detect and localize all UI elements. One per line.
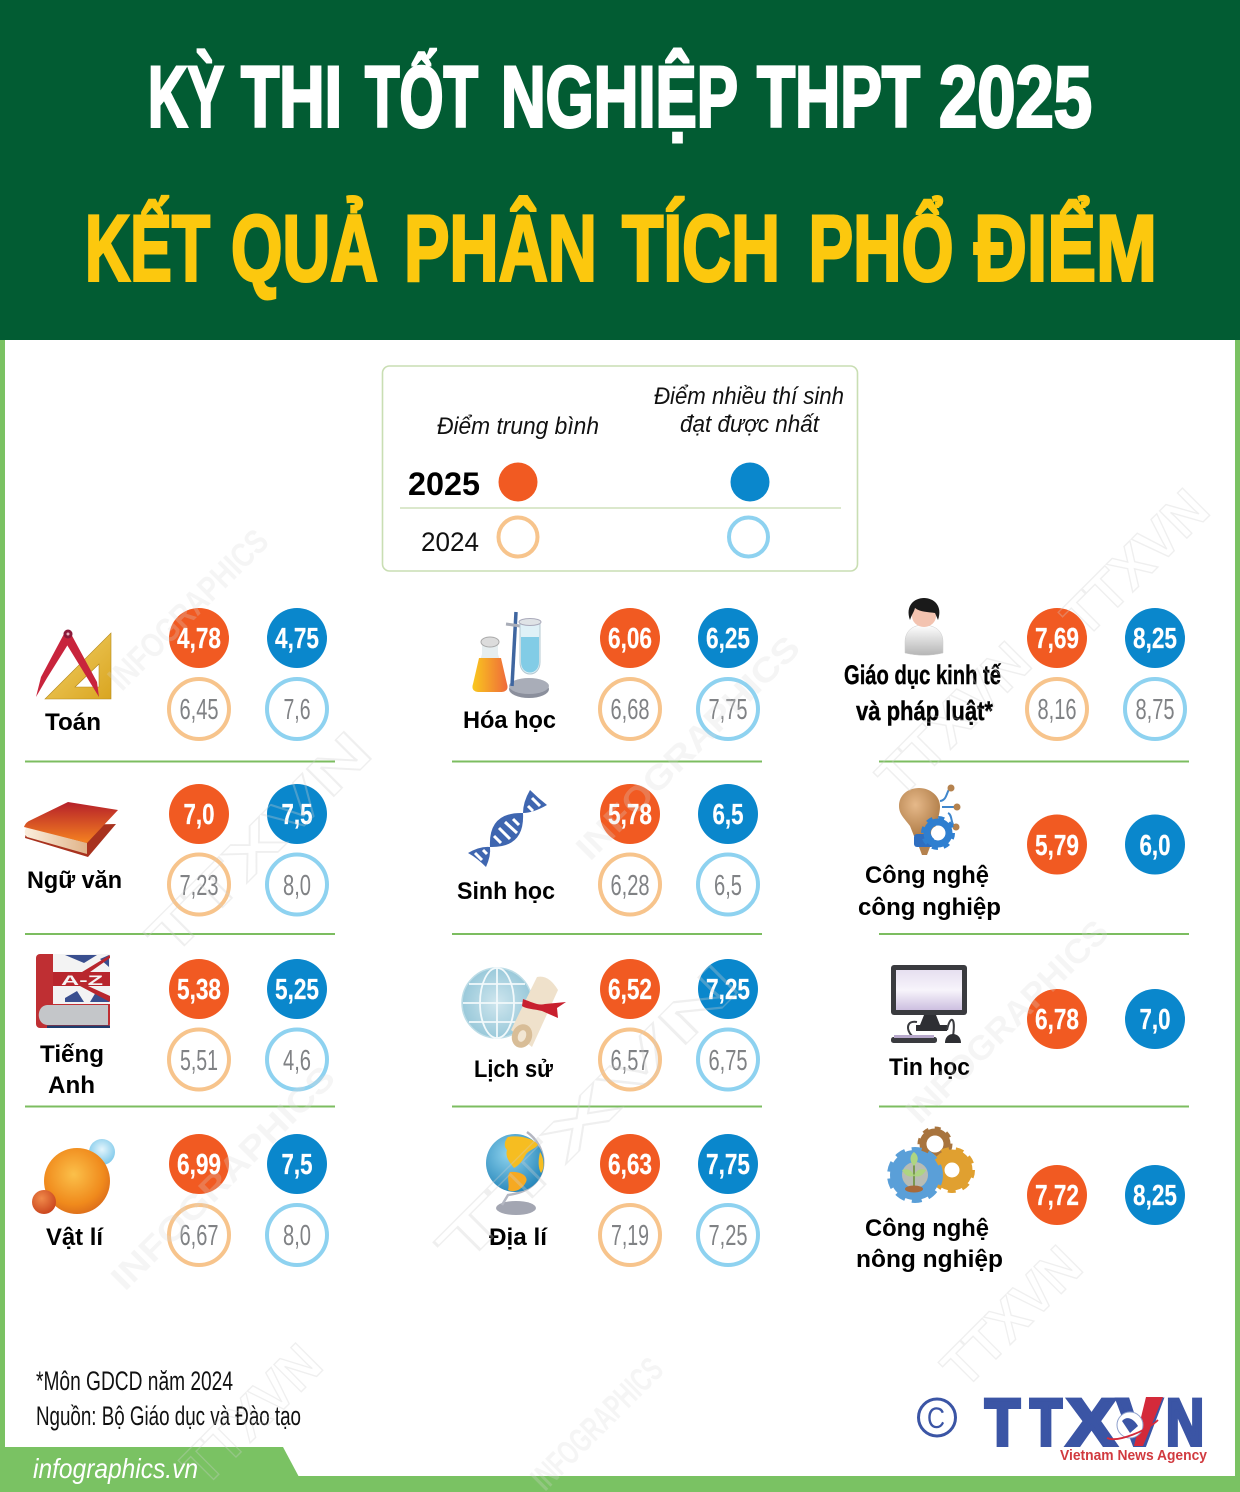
source: Nguồn: Bộ Giáo dục và Đào tạo: [36, 1401, 301, 1431]
label: Hóa học: [463, 707, 556, 734]
score 2025 most common: 7,0: [1140, 1004, 1170, 1036]
logo: copyright mark: [918, 1399, 956, 1436]
label: [40, 1041, 104, 1099]
score 2024 average: 7,19: [611, 1220, 649, 1252]
label: và pháp luật*: [856, 696, 993, 726]
score 2025 average: 4,78: [177, 623, 221, 655]
score 2024 most common: [267, 679, 327, 739]
icon: physics spheres: [32, 1139, 115, 1214]
score 2025 average: [169, 1134, 229, 1194]
title line 2: PHỔ: [808, 196, 954, 300]
watermarks: TTXVN: [929, 1234, 1094, 1398]
subject: Ngữ văn: [24, 784, 327, 914]
score 2025 most common: [1125, 989, 1185, 1049]
title line 2: PHÂN: [404, 194, 597, 300]
label: Lịch sử: [474, 1056, 554, 1083]
score 2024 most common: 8,0: [283, 1220, 311, 1252]
score 2025 average: [169, 608, 229, 668]
score 2024 most common: 7,6: [284, 694, 310, 726]
score 2025 most common: 6,5: [712, 799, 744, 831]
subject: Địa lí: [486, 1132, 758, 1265]
agency name: Vietnam News Agency: [1060, 1448, 1207, 1464]
icon: flask and test tube: [472, 612, 549, 698]
score 2024 average: [600, 1030, 660, 1090]
score 2024 most common: 4,6: [283, 1045, 311, 1077]
score 2025 most common: [267, 1134, 327, 1194]
score 2024 average: [600, 679, 660, 739]
logo: TTXVN agency: T: [1030, 1385, 1062, 1459]
icon: English dictionary: [36, 954, 110, 1028]
score 2025 most common: 7,25: [706, 974, 750, 1006]
score 2024 average: 6,45: [180, 694, 218, 726]
score 2025 average: [169, 784, 229, 844]
score 2024 average: [169, 1205, 229, 1265]
label: Anh: [48, 1072, 95, 1099]
icon: compass and set square: [36, 630, 111, 699]
score 2025 most common: [1125, 608, 1185, 668]
score 2024 average: [169, 1030, 229, 1090]
logo: TTXVN agency: N: [1166, 1385, 1204, 1459]
score 2025 average: 6,63: [608, 1149, 652, 1181]
icon: red book: [24, 802, 118, 857]
page frame: green border: [0, 340, 1240, 1492]
watermarks: TTXVN: [424, 951, 751, 1278]
score 2025 average: [1027, 814, 1087, 874]
score 2025 most common: [1125, 814, 1185, 874]
logo: TTXVN agency: V: [1117, 1385, 1162, 1459]
header band: [0, 0, 1240, 340]
score 2025 average: [1027, 1165, 1087, 1225]
logo: copyright mark: C: [927, 1402, 945, 1435]
title line 1: NGHIỆP: [501, 50, 738, 146]
subject: Hóa học: [463, 608, 758, 739]
watermarks: INFOGRAPHICS: [524, 1351, 671, 1492]
legend column heading: most common score: [654, 383, 844, 438]
title line 1: KỲ: [148, 50, 224, 146]
footnote: *Môn GDCD năm 2024: [36, 1366, 233, 1396]
score 2024 most common: 7,25: [708, 1220, 748, 1252]
score 2024 average: [600, 854, 660, 914]
score 2024 most common: 6,5: [714, 870, 742, 902]
score 2024 most common: [267, 1205, 327, 1265]
score 2025 most common: 4,75: [275, 623, 319, 655]
score 2024 average: 6,28: [610, 870, 650, 902]
score 2025 average: 7,72: [1035, 1180, 1079, 1212]
legend column heading: most common score: đạt được nhất: [680, 411, 820, 438]
score 2025 most common: [267, 959, 327, 1019]
score 2024 average: [169, 679, 229, 739]
score 2025 most common: 8,25: [1133, 623, 1177, 655]
subject: Công nghệ công nghiệp: [858, 784, 1185, 921]
score 2024 most common: [698, 1030, 758, 1090]
score 2025 average: 5,79: [1035, 830, 1079, 862]
title line 1: TỐT: [365, 50, 478, 146]
label: Tin học: [889, 1054, 970, 1081]
label: Giáo dục kinh tế: [844, 660, 1002, 690]
score 2024 average: [1027, 679, 1087, 739]
score 2025 average: 6,99: [177, 1149, 221, 1181]
score 2024 average: 6,68: [610, 694, 650, 726]
logo: TTXVN agency: X: [1067, 1385, 1116, 1459]
score 2025 average: 7,0: [184, 799, 214, 831]
score 2025 most common: [698, 1134, 758, 1194]
logo: TTXVN agency: [985, 1385, 1207, 1464]
label: Công nghệ: [865, 862, 989, 889]
watermarks: INFOGRAPHICS: [104, 1059, 343, 1298]
icon: light bulb with gear: [899, 784, 960, 855]
legend row label 2025: 2025: [408, 466, 480, 502]
subject: Tiếng Anh: [36, 954, 327, 1099]
score 2024 average: [600, 1205, 660, 1265]
watermarks: TTXVN: [169, 1332, 334, 1492]
watermarks: INFOGRAPHICS: [101, 522, 276, 698]
subject: Công nghệ nông nghiệp: [856, 1128, 1185, 1273]
score 2025 average: [600, 1134, 660, 1194]
score 2025 most common: 6,25: [706, 623, 750, 655]
label: Tiếng: [40, 1041, 104, 1068]
score 2025 average: 5,78: [608, 799, 652, 831]
score 2025 average: 5,38: [177, 974, 221, 1006]
icon: desktop computer: [891, 965, 967, 1043]
label: nông nghiệp: [856, 1246, 1003, 1273]
subject: Tin học: [889, 965, 1185, 1081]
label: công nghiệp: [858, 894, 1001, 921]
score 2025 average: 6,52: [608, 974, 652, 1006]
icon: person: [905, 598, 943, 655]
score 2024 most common: 6,75: [708, 1045, 748, 1077]
subject: Toán: [36, 608, 327, 739]
score 2024 average: 5,51: [180, 1045, 218, 1077]
legend panel: [382, 366, 858, 571]
legend swatch: 2024 most common: [729, 518, 768, 556]
score 2024 average: [169, 854, 229, 914]
score 2024 average: 7,23: [180, 870, 218, 902]
score 2025 most common: 7,5: [282, 799, 312, 831]
score 2024 most common: 8,0: [283, 870, 311, 902]
score 2024 most common: [698, 679, 758, 739]
legend column heading: most common score: Điểm nhiều thí sinh: [654, 383, 844, 410]
watermarks: TTXVN: [1049, 477, 1221, 648]
label: Địa lí: [489, 1224, 548, 1251]
score 2024 most common: [267, 854, 327, 914]
score 2025 average: [169, 959, 229, 1019]
score 2025 most common: [698, 784, 758, 844]
subject: Sinh học: [457, 784, 758, 914]
score 2025 most common: [1125, 1165, 1185, 1225]
label: Toán: [45, 709, 101, 736]
title line 2: QUẢ: [231, 196, 378, 300]
score 2025 average: [600, 959, 660, 1019]
watermarks: TTXVN: [864, 630, 1043, 808]
subject: Giáo dục kinh tế và pháp luật: [844, 598, 1185, 739]
title line 1: [148, 50, 1092, 146]
score 2025 average: [600, 608, 660, 668]
score 2025 average: [1027, 608, 1087, 668]
title line 1: 2025: [939, 50, 1092, 146]
title line 2: ĐIỂM: [974, 196, 1157, 300]
subject: Vật lí: [32, 1134, 327, 1265]
watermarks: [101, 477, 1221, 1492]
label: Ngữ văn: [27, 867, 122, 894]
label: Vật lí: [46, 1224, 104, 1251]
score 2025 average: 6,78: [1035, 1004, 1079, 1036]
legend swatch: 2025 average: [498, 462, 538, 502]
score 2025 average: [1027, 989, 1087, 1049]
score 2024 most common: [267, 1030, 327, 1090]
icon: desk globe: [486, 1132, 544, 1215]
watermarks: INFOGRAPHICS: [569, 629, 808, 868]
logo: TTXVN agency: T: [985, 1385, 1020, 1459]
score 2025 most common: [698, 959, 758, 1019]
icon: globe and scroll: [462, 968, 566, 1051]
title line 1: THPT: [757, 50, 920, 146]
score 2024 average: 8,16: [1038, 694, 1076, 726]
score 2025 most common: 7,75: [706, 1149, 750, 1181]
score 2025 average: [600, 784, 660, 844]
score 2024 average: 6,67: [180, 1220, 218, 1252]
score 2025 most common: 7,5: [282, 1149, 312, 1181]
legend row label 2024: 2024: [421, 527, 479, 557]
watermarks: INFOGRAPHICS: [899, 913, 1117, 1131]
score 2025 most common: 6,0: [1140, 830, 1170, 862]
watermarks: TTXVN: [134, 719, 384, 968]
icon: DNA helix: [468, 790, 547, 867]
title line 2: KẾT: [85, 196, 210, 300]
subject: Lịch sử: [462, 959, 758, 1090]
score 2024 most common: 8,75: [1136, 694, 1174, 726]
score 2024 most common: 7,75: [708, 694, 748, 726]
label: Công nghệ: [865, 1215, 989, 1242]
title line 2: [85, 194, 1157, 300]
score 2024 most common: [698, 1205, 758, 1265]
title line 2: TÍCH: [622, 196, 780, 300]
score 2024 most common: [698, 854, 758, 914]
website credit: infographics.vn: [33, 1453, 198, 1484]
legend swatch: 2025 most common: [730, 462, 770, 502]
icon: gears with seedling: [889, 1128, 974, 1201]
icon: English dictionary: A-Z: [61, 972, 104, 988]
score 2025 most common: 8,25: [1133, 1180, 1177, 1212]
score 2024 average: 6,57: [610, 1045, 650, 1077]
legend column heading: average score: Điểm trung bình: [437, 413, 599, 440]
score 2024 most common: [1125, 679, 1185, 739]
label: Sinh học: [457, 878, 555, 905]
label: [844, 660, 1002, 726]
score 2025 most common: [698, 608, 758, 668]
score 2025 average: 6,06: [608, 623, 652, 655]
score 2025 most common: 5,25: [275, 974, 319, 1006]
title line 1: THI: [241, 50, 342, 146]
score 2025 most common: [267, 608, 327, 668]
score 2025 average: 7,69: [1035, 623, 1079, 655]
legend swatch: 2024 average: [498, 518, 538, 556]
label: [858, 862, 1001, 921]
score 2025 most common: [267, 784, 327, 844]
label: [856, 1215, 1003, 1273]
